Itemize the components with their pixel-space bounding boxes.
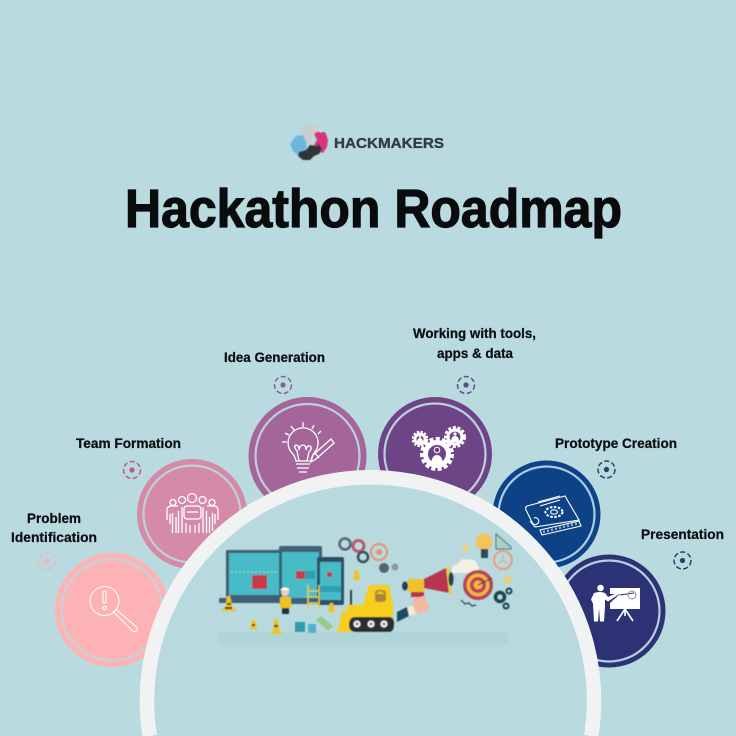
central arc panel <box>147 477 594 736</box>
small gears and network <box>461 588 512 608</box>
marker: Prototype Creation <box>598 461 615 478</box>
logo wordmark: HACKMAKERS <box>334 135 444 152</box>
label: Presentation: Presentation <box>641 526 724 542</box>
title: Hackathon Roadmap <box>125 180 622 239</box>
marker: Idea Generation <box>274 376 292 394</box>
label: Working with tools, apps & data <box>413 325 536 361</box>
label: Idea Generation: Idea Generation <box>224 349 325 365</box>
circle: Presentation <box>552 554 666 668</box>
circle: Problem Identification <box>55 553 169 667</box>
icon: blueprint and ruler <box>526 496 581 535</box>
icon: magnifier with exclamation <box>90 586 137 632</box>
clock <box>494 551 512 569</box>
cloud <box>452 559 479 573</box>
ground shadow <box>218 632 508 645</box>
icon: three gears <box>413 427 465 469</box>
laptop <box>219 550 285 603</box>
label: Working with tools, apps & data: Working with tools, <box>413 325 536 341</box>
chart card <box>496 534 511 549</box>
gear cluster <box>340 538 398 573</box>
circle: Team Formation <box>137 459 247 569</box>
icon: presenter at board <box>591 585 640 622</box>
bulldozer <box>335 585 394 632</box>
bulb <box>462 534 492 558</box>
circle: Prototype Creation <box>492 460 600 568</box>
phone <box>317 557 344 605</box>
label: Problem Identification <box>11 510 97 545</box>
marker: Working with tools <box>458 376 474 394</box>
circle: Working with tools <box>378 397 492 511</box>
marker: Team Formation <box>124 462 140 478</box>
logo: Hackmakers <box>290 123 444 160</box>
marker: Problem Identification <box>38 552 56 570</box>
target <box>463 570 512 600</box>
tablet <box>279 546 322 604</box>
label: Working with tools, apps & data: apps & data <box>437 345 513 361</box>
megaphone with hand <box>397 565 454 622</box>
icon: light bulb and pencil <box>282 422 334 472</box>
illustration: devices, bulldozer and megaphone <box>218 534 512 645</box>
label: Team Formation: Team Formation <box>76 435 181 451</box>
icon: puzzle logo <box>290 123 328 160</box>
blocks <box>295 616 333 633</box>
icon: team of people <box>167 494 218 533</box>
traffic cones <box>222 570 360 634</box>
worker <box>280 588 291 614</box>
label: Problem Identification: Problem <box>27 510 81 526</box>
ladder <box>308 585 319 609</box>
label: Prototype Creation: Prototype Creation <box>555 435 677 451</box>
label: Problem Identification: Identification <box>11 529 97 545</box>
circle: Idea Generation <box>248 397 366 515</box>
marker: Presentation <box>674 552 691 569</box>
